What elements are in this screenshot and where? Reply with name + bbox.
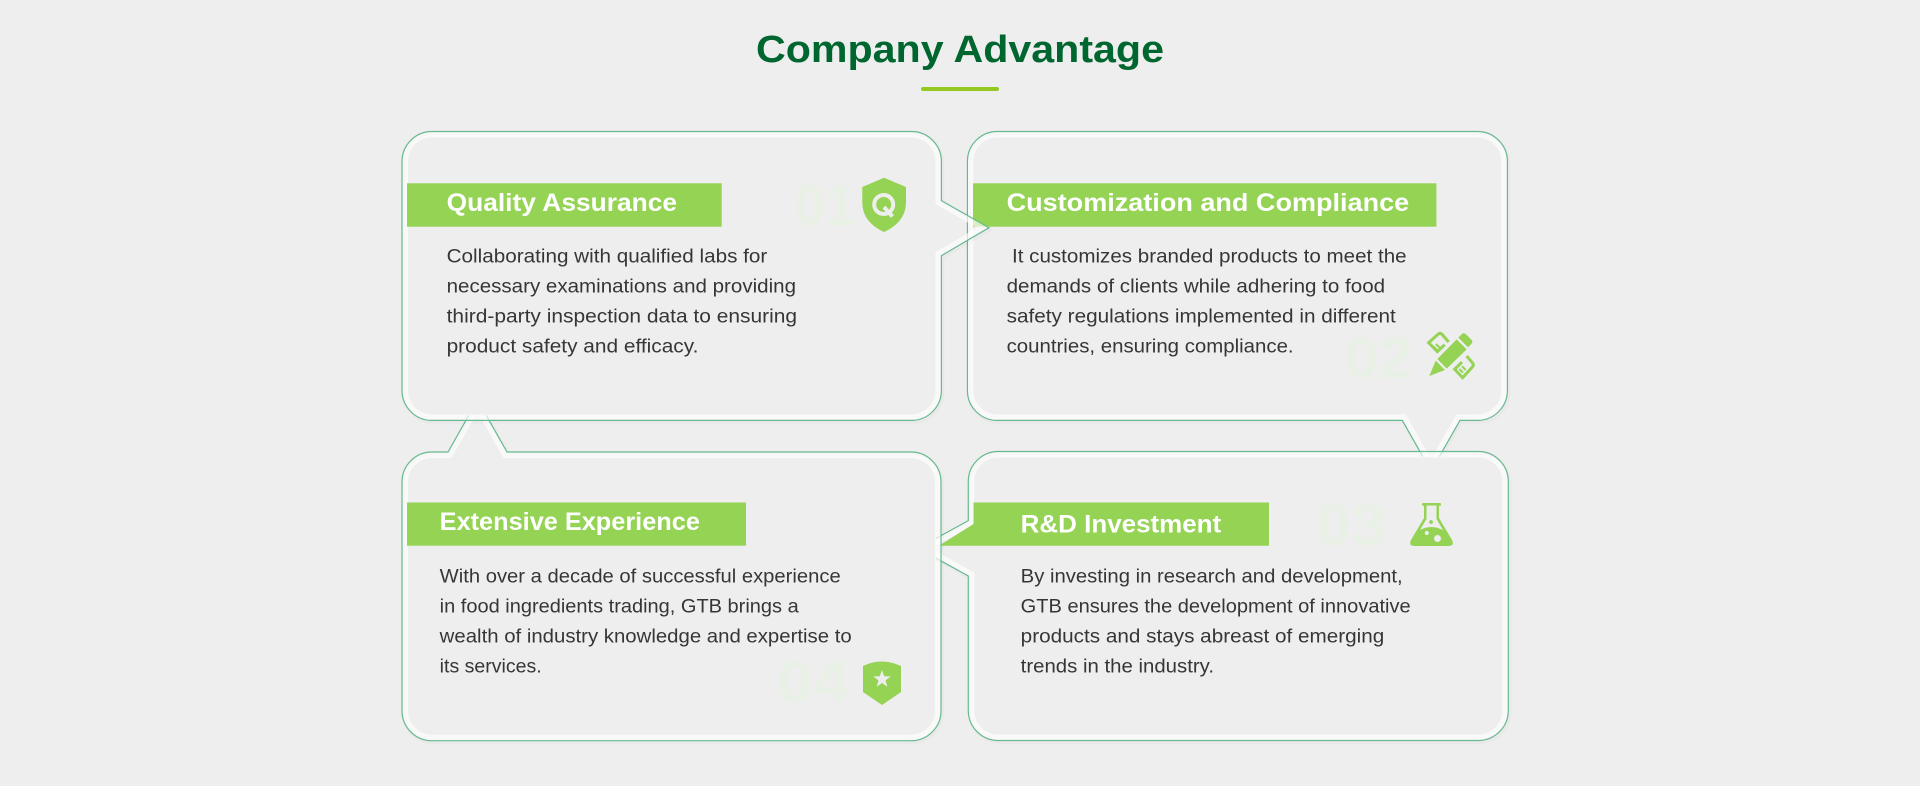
body text: trends in the industry. [1021,657,1214,678]
body text: products and stays abreast of emerging [1021,627,1384,648]
heading bar [407,183,722,227]
number 04: 04 [777,650,849,714]
title: Company Advantage [756,29,1164,71]
body text: With over a decade of successful experience [440,567,841,588]
title underline [921,87,999,91]
heading: R&D Investment [1021,510,1222,538]
heading bar with pointer [939,502,1269,546]
heading bar [407,502,746,546]
body text [1007,247,1407,358]
icon: star badge [863,662,901,705]
body text: safety regulations implemented in different [1007,307,1397,328]
heading: Quality Assurance [447,189,677,217]
body text: product safety and efficacy. [447,337,698,358]
body text: It customizes branded products to meet the [1012,247,1407,268]
body text: in food ingredients trading, GTB brings a [440,597,799,618]
speech bubble outline 03 [918,452,1510,742]
speech bubble outline 02 [967,132,1509,473]
speech bubble outline 04 [402,400,942,743]
heading: Customization and Compliance [1007,189,1409,217]
panel: Quality Assurance [402,132,990,422]
body text: By investing in research and development, [1021,567,1403,588]
icon: flask [1410,503,1453,546]
icon: Q shield [862,178,906,232]
body text: countries, ensuring compliance. [1007,337,1294,358]
panel: R&D Investment [918,452,1510,742]
body text [439,567,852,678]
body text: Collaborating with qualified labs for [447,247,768,268]
body text: GTB ensures the development of innovative [1021,597,1411,618]
body text: demands of clients while adhering to food [1007,277,1385,298]
body text: wealth of industry knowledge and expertise to [439,627,852,648]
number 02: 02 [1344,326,1413,391]
body text: necessary examinations and providing [447,277,796,298]
number 03: 03 [1316,493,1386,558]
body text [1021,567,1411,678]
number 01: 01 [795,174,855,239]
body text [447,247,797,358]
speech bubble outline 01 [402,132,990,422]
body text: third-party inspection data to ensuring [447,307,797,328]
body text: its services. [440,657,542,678]
icon: pencil and ruler [1429,333,1473,378]
panel: Extensive Experience [402,400,942,743]
panel: Customization and Compliance [967,132,1509,473]
heading bar [973,183,1436,227]
heading: Extensive Experience [440,508,700,536]
